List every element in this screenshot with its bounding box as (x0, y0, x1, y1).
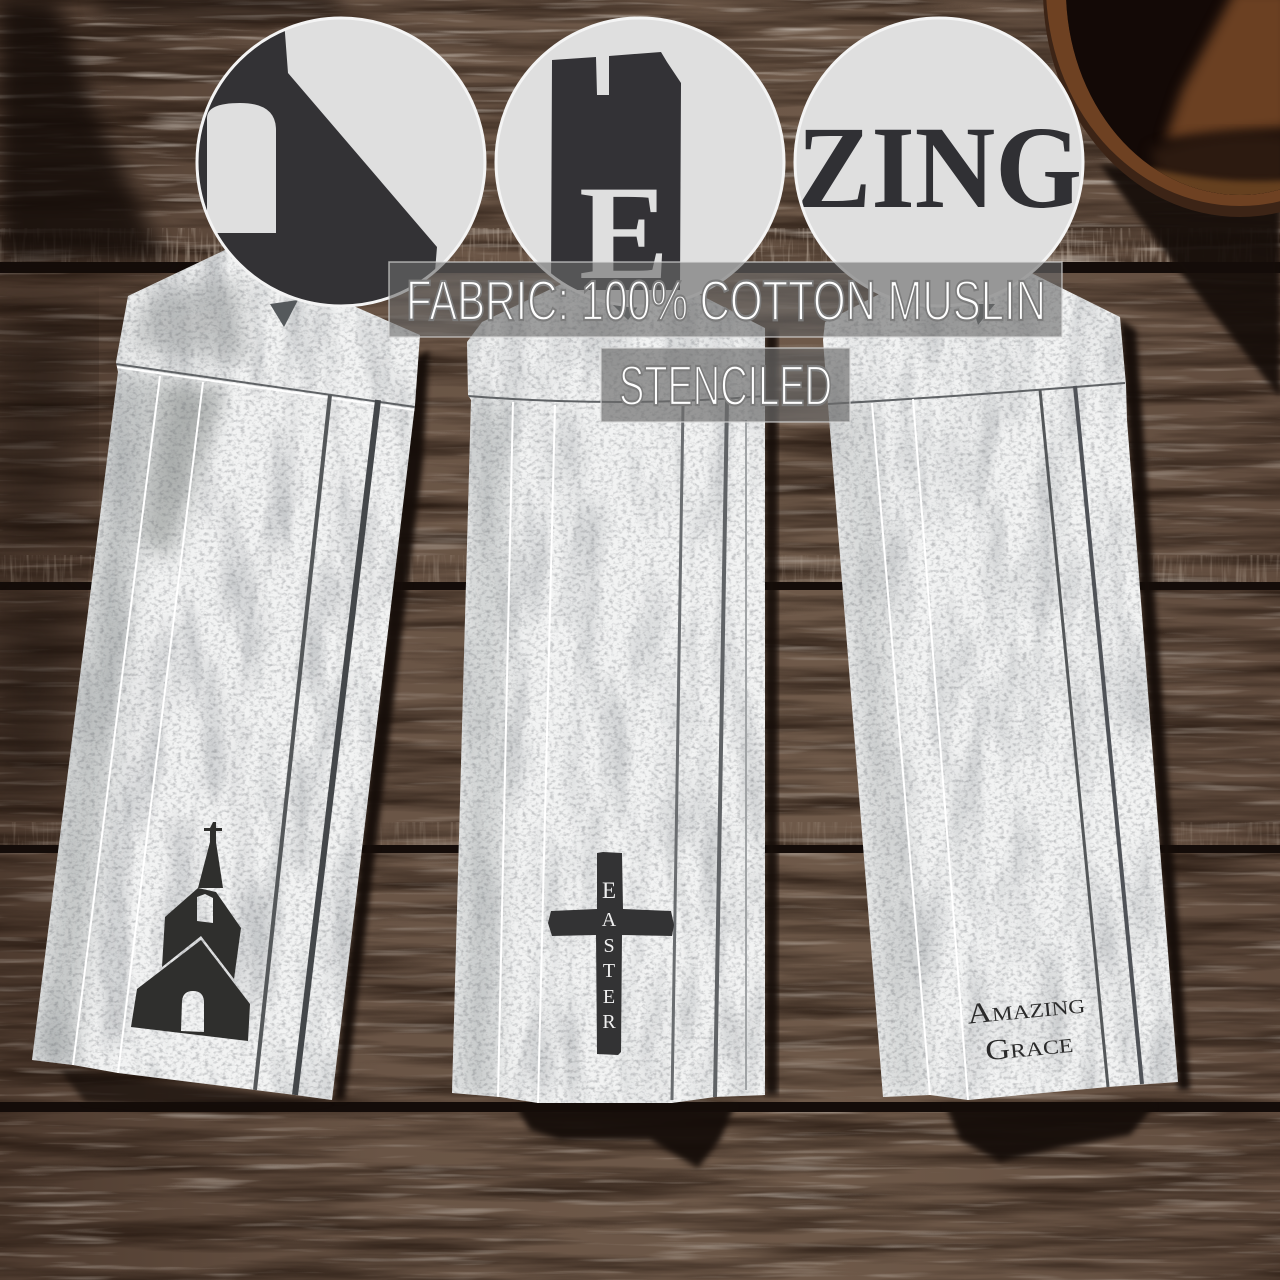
zoom circle: cross detail: E (579, 159, 669, 308)
towel: church (20, 240, 430, 1110)
text: Amazing Grace stencil: AMAZING (966, 987, 1086, 1031)
icon: cross stencil with EASTER: R (602, 1011, 616, 1033)
text: Amazing Grace stencil: GRACE (984, 1027, 1074, 1067)
caption: stenciled (601, 348, 850, 422)
caption: stenciled: STENCILED (619, 354, 832, 418)
zoom circle: lettering detail (794, 17, 1084, 307)
church pleat lines (73, 364, 415, 1095)
icon: cross stencil with EASTER: E (603, 986, 615, 1008)
icon: cross stencil with EASTER (548, 852, 674, 1055)
cross pleat lines (468, 396, 765, 1103)
text: Amazing Grace stencil (966, 987, 1086, 1067)
tab notch shadows (270, 300, 995, 327)
zoom circle: church detail (190, 17, 486, 320)
zoom circle: cross detail (495, 17, 785, 308)
Amazing Grace pleat lines (828, 383, 1142, 1100)
towel: Easter cross (452, 284, 765, 1103)
wooden bowl, top right (1040, 0, 1280, 217)
zoom circle: lettering detail: ZING (797, 102, 1082, 233)
towel: Amazing Grace (820, 240, 1185, 1110)
icon: cross stencil with EASTER: A (602, 909, 617, 931)
icon: cross stencil with EASTER: S (603, 935, 615, 957)
caption: fabric (389, 262, 1062, 337)
icon: cross stencil with EASTER: E (602, 878, 616, 903)
icon: church stencil (131, 822, 250, 1041)
icon: cross stencil with EASTER: T (603, 960, 615, 982)
caption: fabric: FABRIC: 100% COTTON MUSLIN (406, 269, 1046, 333)
